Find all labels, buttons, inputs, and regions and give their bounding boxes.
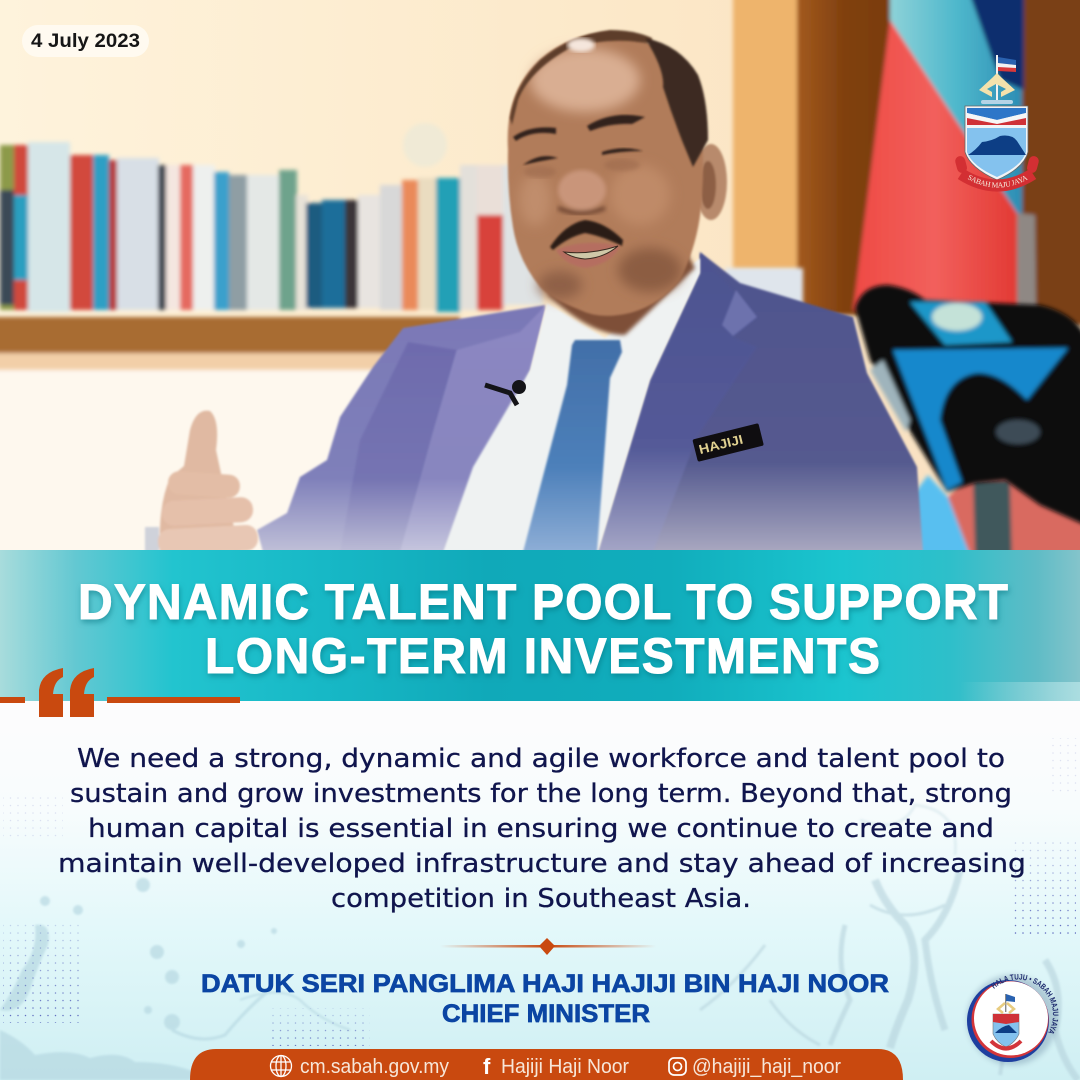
speaker name: CHIEF MINISTER — [442, 1000, 650, 1028]
icon: facebook: f — [483, 1054, 491, 1079]
mouth — [556, 243, 620, 268]
man's right lapel — [598, 252, 717, 550]
footer bar — [190, 1049, 903, 1080]
photo background: wood panels and flag — [733, 0, 1080, 325]
website: cm.sabah.gov.my — [300, 1056, 449, 1078]
splash: bottom left — [0, 878, 350, 1080]
Hala Tuju seal: HALA TUJU • SABAH MAJU JAYA — [990, 974, 1058, 1034]
quote text: sustain and grow investments for the long term. Beyond that, strong — [70, 779, 1012, 809]
title: LONG-TERM INVESTMENTS — [205, 628, 880, 684]
dot grid: right — [1013, 837, 1076, 934]
ornament divider — [440, 938, 656, 955]
facebook name: Hajiji Haji Noor — [501, 1056, 629, 1078]
man's left sleeve and chest — [257, 305, 545, 552]
man's raised hand — [145, 411, 259, 556]
cheek shading — [519, 165, 682, 299]
forehead light — [530, 48, 640, 112]
quotation mark with rules — [0, 668, 240, 717]
nose — [558, 170, 606, 213]
teeth — [564, 246, 618, 259]
photo background: wall — [0, 0, 1080, 550]
man's right jacket — [598, 252, 923, 552]
man's tie — [523, 340, 622, 552]
eye bags — [524, 159, 640, 178]
quote text: maintain well-developed infrastructure and stay ahead of increasing — [58, 849, 1026, 879]
man's left lapel — [400, 305, 546, 552]
lapel microphone — [485, 380, 526, 405]
shield top chevron — [967, 108, 1026, 125]
icon: globe — [270, 1055, 292, 1077]
title — [78, 574, 1008, 684]
photo background: bookshelf with books — [0, 123, 543, 312]
dot grid: left — [3, 923, 79, 1023]
dot grid: upper left faint — [3, 795, 63, 840]
crest arms — [979, 73, 1015, 97]
water splash decoration — [0, 805, 1078, 1080]
Sabah state crest — [955, 55, 1039, 192]
photo: Chief Minister in front of bookshelf — [0, 0, 1080, 560]
jacket body panel, left — [349, 342, 456, 514]
dot grid: bottom centre — [270, 1008, 370, 1046]
eyebrows — [513, 115, 645, 141]
quote text: human capital is essential in ensuring we continue to create and — [88, 814, 994, 844]
name badge — [692, 423, 764, 462]
man's neck — [548, 240, 695, 335]
instagram handle: @hajiji_haji_noor — [692, 1056, 841, 1078]
man's shirt — [443, 258, 700, 552]
title banner — [0, 550, 1080, 701]
date pill: 4 July 2023 — [31, 31, 140, 52]
man's ear — [695, 144, 727, 220]
eyes — [523, 148, 643, 165]
title: DYNAMIC TALENT POOL TO SUPPORT — [78, 574, 1008, 630]
quote text — [58, 744, 1026, 914]
hair — [510, 30, 708, 167]
name badge: HAJIJI — [697, 432, 744, 457]
lower panel background — [0, 700, 1080, 1080]
shield field — [967, 128, 1026, 177]
photo background: wooden shelf — [0, 268, 803, 560]
quote text: We need a strong, dynamic and agile workforce and talent pool to — [77, 744, 1005, 774]
collar highlight — [722, 290, 757, 336]
speaker name — [201, 970, 889, 1028]
microphone housing — [855, 285, 1080, 525]
crest ribbon: SABAH MAJU JAYA — [968, 175, 1028, 188]
quote text: competition in Southeast Asia. — [331, 884, 751, 914]
dot grid: upper right faint — [1048, 738, 1080, 796]
Mount Kinabalu — [968, 136, 1026, 155]
forehead shine — [567, 38, 595, 52]
man's head — [508, 32, 703, 316]
splash: center right — [700, 805, 1078, 1080]
date pill — [22, 25, 149, 57]
moustache — [550, 220, 623, 250]
Hala Tuju seal — [965, 972, 1059, 1067]
crest flag — [996, 55, 1016, 101]
speaker name: DATUK SERI PANGLIMA HAJI HAJIJI BIN HAJI NOOR — [201, 970, 889, 998]
icon: instagram — [669, 1058, 686, 1075]
crest stones — [981, 100, 1013, 104]
photo background: blue and red below microphone — [917, 473, 1080, 550]
crest shield — [965, 106, 1028, 180]
